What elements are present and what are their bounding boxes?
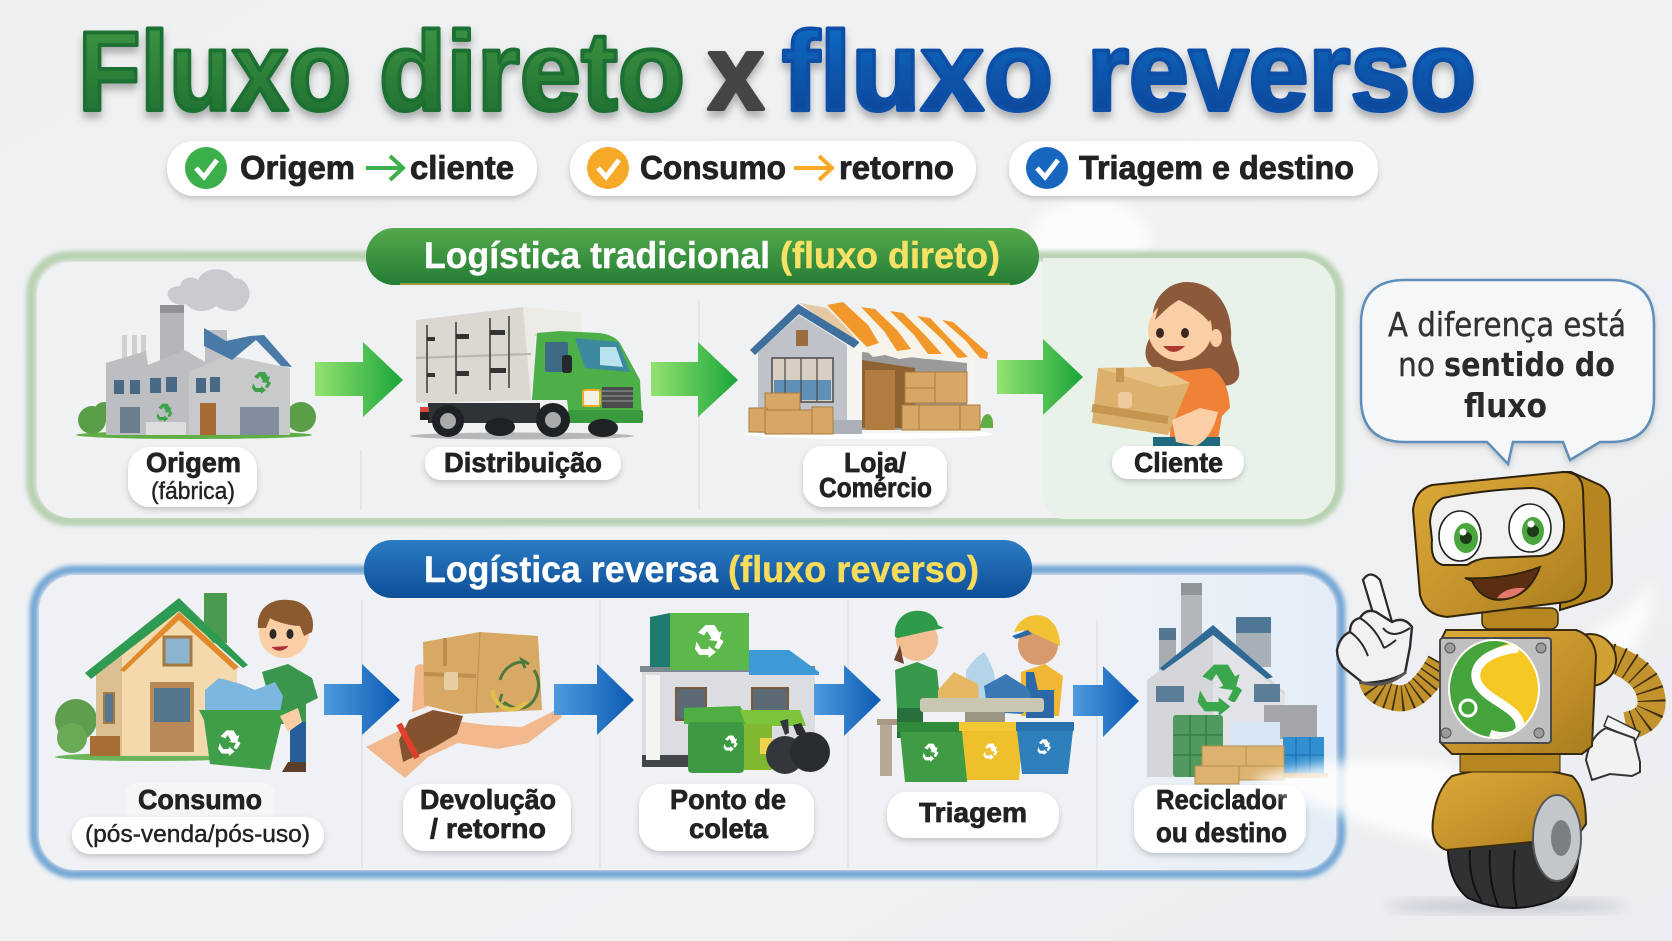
heading: reversa: (fluxo reverso) (728, 549, 979, 590)
robot torso (1440, 630, 1596, 754)
label: consumo: Consumo (138, 784, 262, 815)
label: triagem: Triagem (919, 797, 1027, 828)
icon: workers sorting (877, 611, 1074, 782)
robot right arm (1564, 634, 1652, 780)
label: devolucao retorno: / retorno (430, 813, 546, 844)
icon: client with box (1092, 282, 1239, 447)
pill: consumo retorno: Consumo (640, 149, 786, 186)
label: origem: Origem (146, 447, 241, 478)
icon: recycler plant (1147, 583, 1328, 784)
client tinted zone (1043, 258, 1335, 519)
pill: consumo retorno (570, 141, 976, 196)
label: reciclador (1134, 784, 1306, 853)
label: ponto de coleta: coleta (689, 813, 768, 844)
robot mascot (1250, 472, 1652, 912)
pill: origem cliente: Origem (240, 149, 355, 186)
label: reciclador: ou destino (1156, 817, 1287, 848)
robot wheel (1433, 768, 1586, 908)
icon: collection point (640, 613, 830, 774)
arrow: ponto de coleta to triagem (814, 665, 881, 736)
title: fluxo (782, 9, 1053, 134)
icon: store (743, 302, 993, 439)
label: origem: (fábrica) (151, 478, 235, 505)
label: loja comercio: Loja/ (844, 447, 906, 478)
label: loja comercio (803, 446, 947, 507)
arrow: devolucao to ponto de coleta (554, 664, 634, 735)
pill: triagem e destino (1009, 141, 1378, 196)
robot neck (1482, 608, 1558, 629)
pill: origem cliente (167, 141, 537, 196)
title: Fluxo (78, 9, 351, 134)
robot head (1413, 472, 1612, 617)
arrow: triagem to reciclador (1073, 666, 1139, 737)
logo (1448, 639, 1540, 739)
panel: logistica reversa (34, 540, 1341, 874)
label: reciclador: Reciclador (1156, 784, 1287, 815)
pill: origem cliente: cliente (410, 149, 514, 186)
title (78, 9, 1476, 134)
label: distribuicao: Distribuição (444, 447, 602, 478)
robot pointing hand (1337, 574, 1412, 684)
title: direto (379, 9, 685, 134)
icon: house and man with bin (55, 593, 318, 772)
label: ponto de coleta (639, 784, 814, 851)
label: devolucao retorno: Devolução (420, 784, 556, 815)
label: ponto de coleta: Ponto de (670, 784, 786, 815)
speech bubble: fluxo (1464, 386, 1547, 425)
arrow: consumo to devolucao (324, 664, 400, 735)
icon: truck (410, 307, 643, 440)
speech bubble: A diferença está (1388, 305, 1626, 344)
heading: reversa (364, 540, 1032, 598)
title: reverso (1087, 9, 1476, 134)
label: origem (128, 447, 257, 507)
arrow: distribuicao to loja (651, 342, 738, 417)
heading: tradicional (366, 228, 1039, 285)
panel: logistica tradicional (31, 228, 1339, 521)
icon: hand returning box (366, 632, 562, 778)
heading: tradicional: (fluxo direto) (780, 235, 1000, 276)
arrow: loja to cliente (997, 339, 1083, 415)
label: consumo (72, 783, 324, 854)
title: x (708, 14, 764, 132)
label: triagem (887, 792, 1059, 838)
speech bubble (1361, 280, 1654, 464)
pill: triagem e destino: Triagem e destino (1079, 149, 1354, 186)
heading: reversa: Logística reversa (424, 549, 718, 590)
label: cliente: Cliente (1134, 447, 1223, 478)
icon: factory (76, 269, 316, 439)
label: cliente (1112, 446, 1244, 479)
pill: consumo retorno: retorno (839, 149, 954, 186)
label: loja comercio: Comércio (819, 472, 932, 503)
heading: tradicional: Logística tradicional (424, 235, 770, 276)
arrow: origem to distribuicao (315, 342, 403, 417)
speech bubble: sentido do (1444, 345, 1615, 384)
robot left arm (1372, 662, 1440, 698)
label: consumo: (pós-venda/pós-uso) (85, 821, 310, 848)
label: devolucao retorno (403, 784, 571, 851)
speech bubble: no (1398, 345, 1435, 384)
